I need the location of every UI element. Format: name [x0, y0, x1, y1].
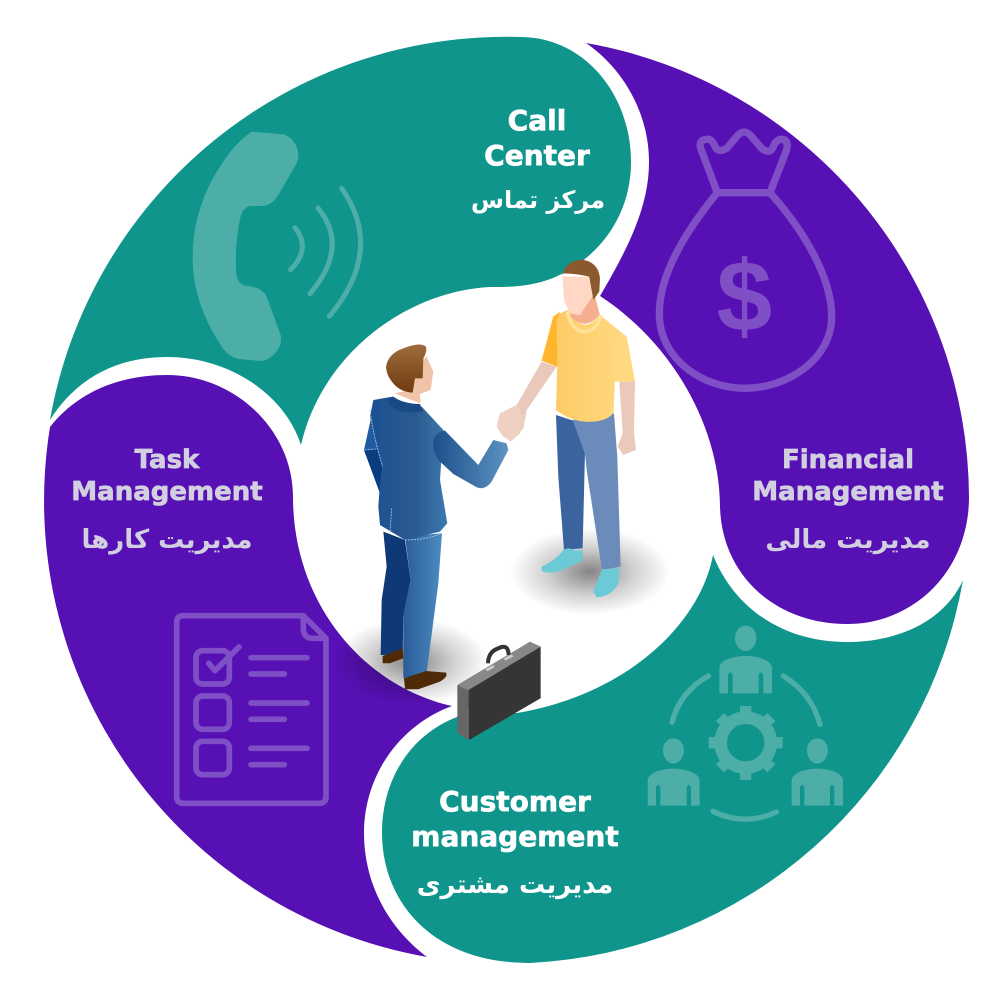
heading: call center: مرکز تماس [471, 186, 605, 214]
heading: financial management: Financial [782, 445, 914, 475]
heading: customer management [411, 785, 619, 900]
heading: financial management [752, 445, 944, 555]
heading: customer management: Customer [439, 785, 591, 818]
icon: checklist [177, 616, 326, 803]
heading: call center: Call [508, 104, 566, 137]
heading: call center [471, 104, 605, 214]
icon: briefcase [457, 642, 541, 740]
panel: task management [44, 375, 452, 957]
shadow: right man [510, 528, 670, 615]
illustration: handshake [335, 260, 670, 740]
heading: task management: Management [71, 477, 263, 507]
heading: task management [71, 445, 263, 555]
figure: man in yellow shirt [497, 260, 636, 597]
heading: financial management: Management [752, 477, 944, 507]
panel: call center [50, 37, 631, 445]
icon: people and gear [648, 626, 843, 819]
heading: call center: Center [484, 139, 590, 172]
heading: task management: Task [135, 445, 200, 475]
icon: phone [193, 132, 361, 361]
panel: financial management [586, 43, 969, 624]
heading: task management: مدیریت کارها [81, 525, 253, 555]
icon: money bag [659, 132, 832, 388]
icon: money bag: $ [717, 241, 772, 353]
heading: financial management: مدیریت مالی [765, 525, 931, 555]
figure: man in blue suit [364, 345, 524, 689]
panel: customer management [382, 555, 963, 963]
shadow: left man [335, 618, 488, 705]
heading: customer management: مدیریت مشتری [417, 870, 613, 900]
heading: customer management: management [411, 820, 619, 853]
